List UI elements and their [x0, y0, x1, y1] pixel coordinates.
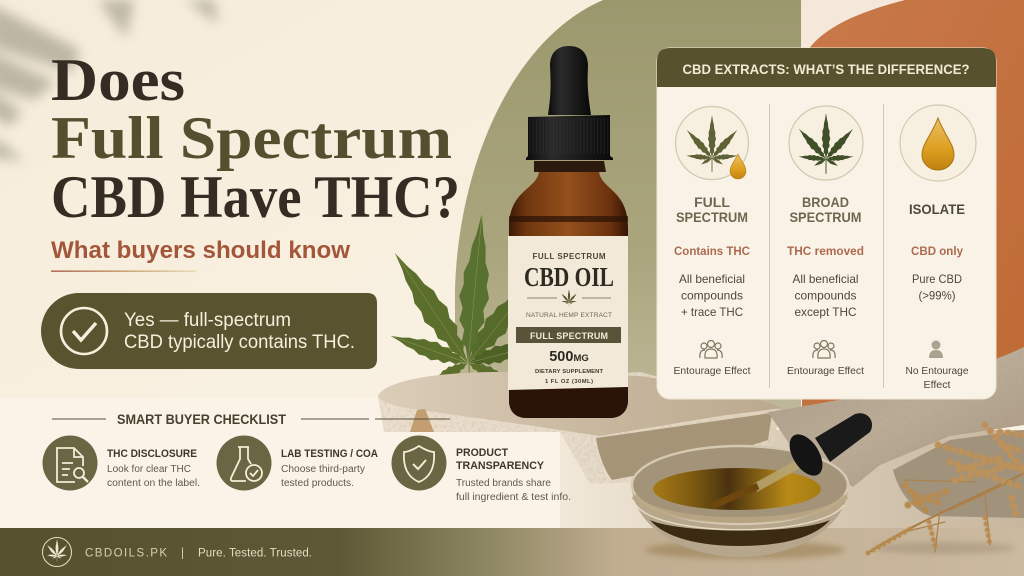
name: BROAD [802, 194, 849, 210]
icon: leaf [789, 106, 863, 180]
oil [653, 468, 821, 510]
answer pill [41, 293, 377, 369]
checklist item: lab testing [216, 436, 378, 490]
icon: oil drop [900, 105, 976, 181]
heading: TRANSPARENCY [456, 460, 545, 472]
background: olive arch [455, 0, 801, 420]
dried flowers [868, 425, 1024, 554]
description [792, 272, 858, 319]
label: CBD OIL: CBD OIL [524, 262, 614, 292]
effect: Entourage Effect [674, 365, 751, 377]
description: Choose third-party [281, 464, 365, 475]
effect: No Entourage [906, 365, 969, 377]
answer text: Yes — full-spectrum [124, 310, 291, 331]
stone front face [378, 372, 782, 484]
column: broad spectrum [787, 106, 864, 377]
effect [906, 365, 969, 391]
description [281, 464, 365, 489]
label: volume: 1 FL OZ (30ML) [545, 379, 593, 385]
label: band [516, 327, 621, 343]
stone warm patch [410, 409, 434, 432]
THC status: CBD only [911, 244, 963, 258]
effect: Entourage Effect [787, 365, 864, 377]
THC status: Contains THC [674, 244, 750, 258]
background: lower cream band [0, 398, 640, 528]
comparison panel [657, 48, 996, 399]
icon: shield [392, 436, 446, 490]
description: except THC [794, 305, 857, 319]
description: Trusted brands share [456, 478, 551, 489]
stone dark front [596, 413, 772, 480]
label: strength: 500MG [549, 349, 589, 365]
amber glass body [509, 172, 628, 418]
answer text: CBD typically contains THC. [124, 332, 355, 353]
background: table surface [560, 430, 1024, 576]
name [676, 194, 748, 225]
subtitle: What buyers should know [51, 237, 350, 264]
description [679, 272, 745, 319]
bowl body [632, 490, 848, 557]
fabric [768, 347, 1024, 518]
bottle [508, 46, 628, 418]
label: supplement: DIETARY SUPPLEMENT [535, 369, 603, 375]
main fold [768, 347, 1024, 487]
bowl of oil [632, 413, 872, 559]
description: Pure CBD [912, 272, 962, 286]
panel header: CBD EXTRACTS: WHAT’S THE DIFFERENCE? [682, 62, 970, 77]
THC status: THC removed [787, 244, 864, 258]
description [107, 464, 200, 489]
label: ornament [527, 289, 611, 306]
description: compounds [681, 288, 743, 302]
bowl shadow [645, 541, 845, 559]
heading: PRODUCT [456, 447, 508, 459]
blurred leaf shadows [0, 0, 218, 160]
description [912, 272, 962, 302]
name: FULL [694, 194, 730, 210]
bottle neck [534, 161, 606, 172]
glass interior [632, 446, 848, 524]
title line 2: Full Spectrum [51, 105, 452, 171]
title line 1: Does [51, 47, 185, 113]
icon: check circle [61, 308, 107, 354]
background: orange arch [802, 0, 1024, 420]
checklist item: transparency [392, 436, 571, 503]
heading [456, 447, 545, 472]
footer bar [0, 528, 1024, 576]
description: content on the label. [107, 478, 200, 489]
name: SPECTRUM [790, 209, 862, 225]
description: full ingredient & test info. [456, 492, 571, 503]
icon: group [813, 340, 835, 358]
label: subtitle: NATURAL HEMP EXTRACT [526, 312, 612, 319]
effect: Effect [924, 379, 951, 391]
column: full spectrum [674, 106, 751, 377]
icon: flask [216, 436, 272, 490]
footer brand: CBDOILS.PK [85, 548, 167, 560]
label: band: FULL SPECTRUM [530, 331, 608, 341]
description: All beneficial [679, 272, 745, 286]
panel body [657, 48, 996, 399]
icon: leaf with drop [676, 106, 748, 180]
dropper bulb [548, 46, 591, 115]
title [51, 47, 460, 230]
description: + trace THC [681, 305, 743, 319]
description: Look for clear THC [107, 464, 191, 475]
heading: THC DISCLOSURE [107, 448, 197, 460]
stone top surface [378, 372, 782, 436]
name: SPECTRUM [676, 209, 748, 225]
description: compounds [794, 288, 856, 302]
footer tagline: Pure. Tested. Trusted. [198, 548, 312, 560]
stone slab [378, 372, 782, 484]
heading: LAB TESTING / COA [281, 448, 378, 460]
glass rim [632, 446, 848, 524]
bottle label [508, 236, 628, 390]
name: ISOLATE [909, 201, 965, 217]
hemp leaf behind bottle [384, 212, 541, 390]
description: All beneficial [792, 272, 858, 286]
icon: group [700, 340, 722, 358]
dropper cap [526, 115, 613, 160]
background: cream top-right corner [795, 0, 1024, 60]
rear fold [893, 430, 1024, 518]
footer separator: | [181, 548, 184, 560]
label: top line: FULL SPECTRUM [532, 252, 606, 261]
description [456, 478, 571, 503]
description: tested products. [281, 478, 354, 489]
answer text [124, 310, 355, 353]
checklist heading: SMART BUYER CHECKLIST [117, 412, 287, 427]
dropper in bowl [712, 413, 872, 506]
icon: person [929, 340, 943, 358]
panel header [657, 48, 996, 87]
footer logo [42, 538, 72, 566]
description: (>99%) [918, 288, 956, 302]
icon: document search [42, 436, 98, 490]
title line 3: CBD Have THC? [51, 164, 460, 230]
checklist item: THC disclosure [42, 436, 200, 490]
name [790, 194, 862, 225]
column: isolate [900, 105, 976, 391]
